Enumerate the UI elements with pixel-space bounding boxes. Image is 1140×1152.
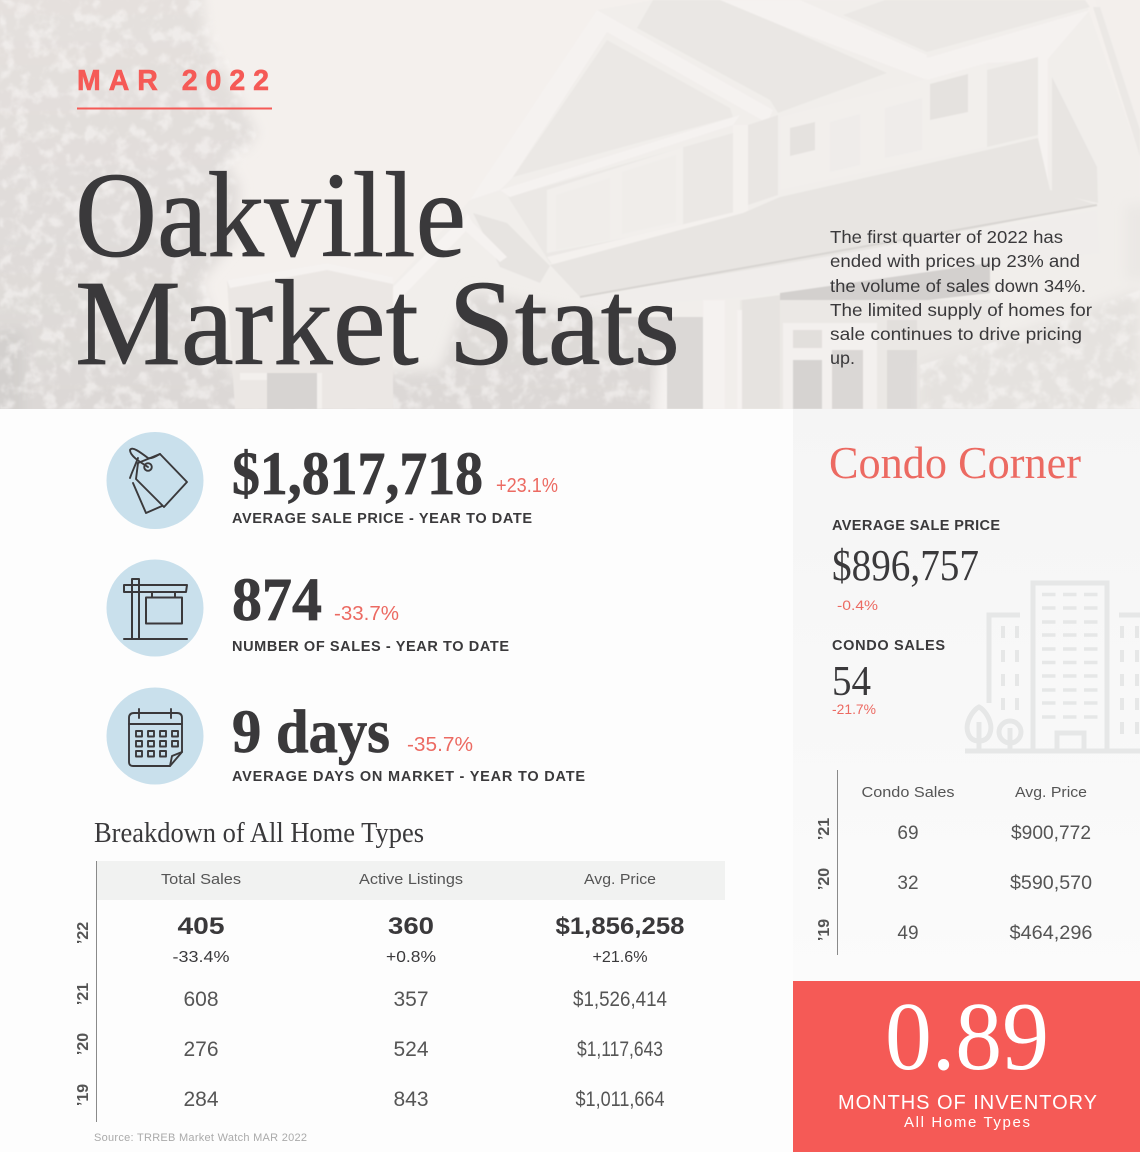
row 2022	[172, 913, 684, 966]
table: condos	[816, 770, 1092, 955]
year labels: ’20	[75, 1033, 92, 1055]
table: condos: $900,772	[1011, 823, 1091, 844]
table: condos: 49	[897, 923, 919, 944]
callout: months of inventory: MONTHS OF INVENTORY	[838, 1092, 1097, 1114]
intro paragraph: the volume of sales down 34%.	[830, 276, 1086, 296]
table: condos: $464,296	[1010, 923, 1092, 944]
year labels	[75, 922, 92, 1106]
row 2022: 405	[178, 913, 224, 940]
row 2020: $1,117,643	[577, 1038, 663, 1061]
column headers	[161, 871, 656, 888]
row 2022: $1,856,258	[556, 913, 684, 940]
table: condos: ’21	[816, 818, 833, 840]
panel: condo corner: -0.4%	[837, 597, 878, 613]
callout: months of inventory: 0.89	[885, 983, 1049, 1091]
intro paragraph: ended with prices up 23% and	[830, 251, 1080, 271]
hero background photo: house and trees	[0, 0, 1140, 430]
row 2019: $1,011,664	[576, 1088, 665, 1111]
title: Market Stats	[75, 256, 680, 391]
row 2022: +21.6%	[592, 949, 648, 966]
stat: days on market	[106, 688, 585, 785]
icon: real estate sign	[106, 560, 204, 656]
stat: average sale price: +23.1%	[496, 475, 558, 497]
stat: days on market: -35.7%	[407, 734, 473, 756]
table: condos: Avg. Price	[1015, 784, 1087, 801]
neighbouring house	[227, 263, 393, 409]
stat: average sale price: $1,817,718	[232, 441, 483, 508]
intro paragraph: The limited supply of homes for	[830, 300, 1092, 320]
stat: days on market: AVERAGE DAYS ON MARKET - YEAR TO DATE	[232, 769, 585, 785]
intro paragraph: sale continues to drive pricing	[830, 324, 1082, 344]
year labels: ’21	[75, 983, 92, 1005]
column headers: Active Listings	[359, 871, 463, 888]
title	[75, 148, 680, 391]
row 2021: 357	[393, 988, 429, 1011]
stat: average sale price: AVERAGE SALE PRICE - YEAR TO DATE	[232, 511, 532, 527]
intro paragraph: up.	[830, 348, 855, 368]
table: condos: $590,570	[1010, 873, 1092, 894]
stat: number of sales: -33.7%	[334, 603, 399, 625]
row 2020: 524	[393, 1038, 429, 1061]
row 2021: 608	[183, 988, 219, 1011]
year labels: ’22	[75, 922, 92, 944]
year labels: ’19	[75, 1084, 92, 1106]
table: condos: Condo Sales	[862, 784, 954, 801]
title: Oakville	[75, 148, 466, 283]
icon: price tags	[106, 432, 204, 529]
row 2020	[183, 1038, 663, 1061]
stat: number of sales: NUMBER OF SALES - YEAR TO DATE	[232, 639, 509, 655]
row 2022: +0.8%	[386, 949, 436, 966]
row 2019: 843	[393, 1088, 429, 1111]
panel: condo corner: AVERAGE SALE PRICE	[832, 518, 1000, 534]
intro paragraph	[830, 227, 1092, 368]
house	[474, 0, 1139, 409]
stat: number of sales: 874	[232, 567, 322, 634]
panel: condo corner	[793, 409, 1140, 981]
row 2020: 276	[183, 1038, 219, 1061]
source note: Source: TRREB Market Watch MAR 2022	[94, 1132, 307, 1144]
intro paragraph: The first quarter of 2022 has	[830, 227, 1063, 247]
row 2022: -33.4%	[172, 949, 230, 966]
row 2021: $1,526,414	[573, 988, 667, 1011]
stat: days on market: 9 days	[232, 699, 390, 766]
table: condos: 69	[897, 823, 919, 844]
panel: condo corner: Condo Corner	[829, 437, 1081, 488]
table: all home types	[75, 861, 725, 1122]
table: condos: ’19	[816, 919, 833, 941]
row 2019: 284	[183, 1088, 219, 1111]
table: condos: 32	[897, 873, 919, 894]
column headers: Total Sales	[161, 871, 241, 888]
row 2022: 360	[388, 913, 434, 940]
stat: number of sales	[106, 560, 509, 656]
heading: breakdown: Breakdown of All Home Types	[94, 818, 424, 849]
trees	[0, 0, 1140, 430]
panel: condo corner: 54	[832, 659, 871, 705]
icon: calendar	[106, 688, 204, 784]
stat: average sale price	[106, 432, 558, 529]
panel: condo corner: CONDO SALES	[832, 638, 945, 654]
panel: condo corner: -21.7%	[832, 701, 876, 717]
panel: condo corner: $896,757	[832, 541, 979, 590]
callout: months of inventory: All Home Types	[904, 1114, 1030, 1131]
callout: months of inventory	[793, 981, 1140, 1152]
date label: MAR 2022	[77, 65, 269, 97]
row 2019	[183, 1088, 665, 1111]
row 2021	[183, 988, 667, 1011]
column headers: Avg. Price	[584, 871, 656, 888]
table: condos: ’20	[816, 868, 833, 890]
icon: condo buildings	[965, 583, 1140, 751]
